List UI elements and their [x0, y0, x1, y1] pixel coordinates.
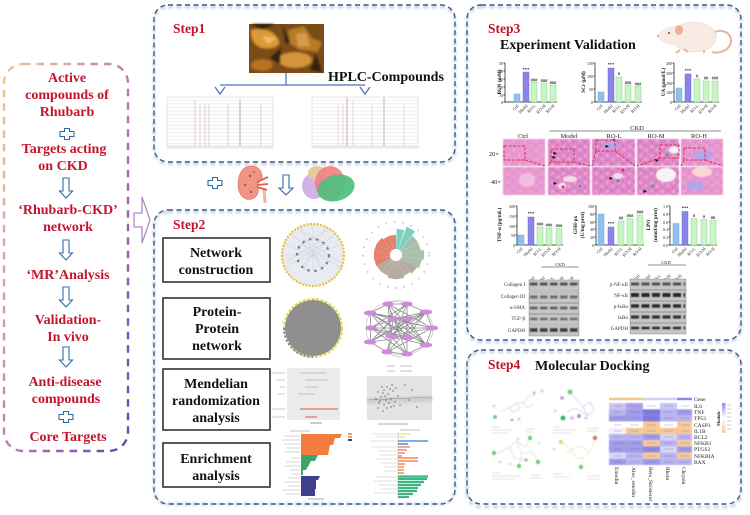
chart: docking heatmap: Emodin: [613, 467, 619, 485]
box: network construction: construction: [179, 263, 254, 278]
chart: BUN: ###: [531, 78, 538, 82]
panel: step 3: [467, 5, 741, 342]
text: rhubarb-CKD network: ‘Rhubarb-CKD’: [18, 203, 118, 218]
western blot: fibrosis markers: TGF-β: [511, 317, 525, 322]
chart: TNF-alpha: 0: [513, 243, 515, 248]
chart: LPO: Model: [676, 246, 688, 258]
chart: TNF-alpha: [496, 204, 563, 258]
western blot: fibrosis markers: Collagen III: [501, 295, 525, 300]
heading: step 3: Step3: [488, 21, 521, 36]
chart: docking heatmap: NFKB1: [694, 441, 712, 447]
chart: TNF-alpha: ***: [528, 211, 535, 216]
icon: kidney: [238, 166, 268, 203]
chart: docking heatmap: CASP3: [694, 423, 711, 429]
box: protein-protein network: Protein-: [193, 305, 242, 320]
chart: BUN: 10: [499, 93, 503, 98]
western blot: NF-kB pathway: NF-κB: [614, 294, 629, 299]
chart: SCr: Model: [602, 103, 614, 115]
histology group labels: Ctrl: [518, 133, 528, 140]
chart: TNF-alpha: RO-H: [551, 246, 562, 257]
chart: docking heatmap: IL6: [694, 404, 702, 410]
chart: docking heatmap: TP53: [694, 416, 706, 422]
chart: LPO: RO-L: [686, 246, 697, 257]
chart: SCr: [580, 61, 642, 115]
box: network construction: [163, 238, 270, 282]
text: MR analysis: ‘MR’Analysis: [26, 268, 110, 283]
chart: BUN: Ctrl: [511, 103, 520, 111]
panel: step 1: [154, 5, 455, 164]
panel: workflow summary: [4, 64, 128, 451]
chart: BUN: ***: [523, 67, 530, 72]
icon: lab mouse: [657, 22, 731, 53]
chart: BUN: 30: [499, 77, 503, 82]
chart: TNF-alpha: RO-M: [540, 246, 552, 258]
chart: TNF-alpha: RO-L: [532, 246, 543, 257]
arrow: down 2: [60, 240, 72, 260]
chart: UA: #: [696, 74, 699, 78]
text: HPLC-Compounds: HPLC-Compounds: [328, 70, 444, 85]
arrow: split tree: [215, 73, 370, 94]
arrow: down 3: [60, 287, 72, 307]
text: targets acting on CKD: on CKD: [38, 159, 88, 174]
chart: GSH-px: ###: [627, 213, 634, 218]
chart: BUN: RO-H: [545, 103, 556, 114]
chart: UA: ##: [704, 76, 709, 80]
chart: BUN: 50: [499, 61, 503, 66]
chart: SCr: SCr (μM): [580, 71, 587, 93]
chart: UA: 300: [666, 71, 672, 76]
chart: docking heatmap: NFKBIA: [694, 454, 715, 460]
chart: GSH-px: ###: [637, 210, 644, 214]
chart: GSH-px: ##: [619, 216, 624, 220]
chart: docking heatmap: Aloe_emodin: [630, 467, 636, 497]
chart: LPO: Ctrl: [670, 246, 679, 254]
chart: UA: RO-M: [697, 103, 709, 115]
chart: GSH-px: GSH-px: [573, 216, 579, 234]
chart: SCr: RO-H: [630, 103, 641, 114]
western blot: fibrosis markers: RO-L: [544, 275, 555, 286]
chart: GSH-px: 20: [590, 235, 594, 240]
arrow: big outline to steps: [134, 197, 150, 243]
box: protein-protein network: Protein: [195, 322, 239, 337]
chart: UA: ***: [685, 68, 692, 73]
chart: LPO: 1.0: [663, 204, 668, 209]
chart: SCr: Ctrl: [595, 103, 604, 111]
text: active compounds of rhubarb: compounds of: [25, 88, 109, 103]
western blot: NF-kB pathway: Ctrl: [632, 273, 641, 281]
chart: docking heatmap: IL1B: [694, 429, 706, 435]
chart: SCr: RO-M: [619, 103, 631, 115]
chart: UA: 200: [666, 81, 672, 86]
chart: LPO: [646, 204, 717, 258]
chart: GSH-px: 0: [592, 243, 594, 248]
chart: docking heatmap: Gene: [694, 397, 706, 403]
chart: UA: RO-L: [689, 103, 700, 114]
histology group labels: 20×: [489, 151, 499, 158]
chart: docking heatmap: Beta_Sitosterol: [647, 467, 653, 501]
western blot: NF-kB pathway: p-IκBα: [614, 305, 628, 310]
chart: LPO: RO-H: [705, 246, 716, 257]
chart: MR forest plot: [272, 368, 340, 423]
chart: SCr: 0: [591, 100, 593, 105]
western blot: NF-kB pathway: CKD: [661, 260, 671, 265]
chart: BUN: 0: [501, 100, 503, 105]
chart: GSH-px: 80: [590, 212, 594, 217]
text: validation in vivo: Validation-: [35, 313, 102, 328]
chart: GSH-px: Model: [602, 246, 614, 258]
icon: plus middle: [208, 178, 222, 188]
chart: UA: Ctrl: [673, 103, 682, 111]
chart: BUN: [496, 61, 557, 115]
chart: SCr: 100: [587, 74, 593, 79]
heading: step 2: Step2: [173, 217, 206, 232]
heading: step 1: Step1: [173, 21, 206, 36]
box: mendelian randomization: Mendelian: [184, 377, 248, 392]
chart: docking heatmap: Chrysin: [680, 467, 686, 485]
chart: GSH-px: RO-H: [632, 246, 643, 257]
chart: SCr: ###: [635, 82, 642, 86]
box: mendelian randomization: analysis: [192, 411, 240, 426]
text: anti-disease compounds: compounds: [32, 392, 101, 407]
box: mendelian randomization: [163, 369, 270, 430]
chart: BUN: RO-M: [535, 103, 547, 115]
chart: hub gene network: [364, 300, 438, 357]
chart: UA: 400: [666, 61, 672, 66]
western blot: fibrosis markers: Model: [534, 275, 546, 287]
legend: heatmap scale: Module: [716, 411, 721, 426]
text: targets acting on CKD: Targets acting: [22, 142, 106, 157]
chart: docking heatmap: TNF: [694, 410, 704, 416]
chart: GSH-px: ***: [608, 221, 615, 226]
box: protein-protein network: [163, 298, 270, 359]
text: active compounds of rhubarb: Rhubarb: [40, 105, 94, 120]
chart: BUN: 20: [499, 85, 503, 90]
chart: TNF-alpha: TNF-α (pg/mL): [496, 208, 503, 242]
chart: LPO: ***: [682, 206, 689, 210]
chart: BUN: ###: [550, 80, 557, 85]
text: validation in vivo: In vivo: [47, 330, 89, 345]
histology group labels: Model: [561, 133, 578, 140]
chart: SCr: ###: [625, 80, 632, 85]
chart: LPO: 0.0: [663, 243, 668, 248]
chart: LPO: 0.6: [663, 220, 668, 225]
image: rhubarb slices: [249, 24, 324, 73]
chart: LPO: (nmol/mg prot): [652, 208, 659, 242]
chart: docking heatmap: Rhein: [664, 467, 670, 480]
panel: step 4: [467, 350, 741, 507]
chart: MR scatter plot: [367, 366, 432, 424]
chart: compound-target circular network: [282, 224, 344, 286]
text: rhubarb-CKD network: network: [43, 220, 93, 235]
panel: step 2: [154, 210, 455, 504]
chart: docking heatmap: PTGS2: [694, 447, 710, 453]
chart: BUN: RO-L: [526, 103, 537, 114]
chart: TNF-alpha: 150: [509, 214, 515, 219]
chart: LPO: LPO: [646, 220, 652, 230]
chart: LPO: ##: [711, 215, 716, 220]
chart: UA: Model: [679, 103, 691, 115]
histology group labels: RO-H: [691, 133, 707, 140]
chart: UA: RO-H: [707, 103, 718, 114]
histology group labels: [489, 125, 721, 186]
icon: venn diagram: [302, 166, 358, 205]
chart: LPO: #: [703, 214, 706, 219]
chart: UA: [660, 61, 719, 115]
chart: enrichment bars left: [282, 431, 352, 499]
chart: GSH-px: 40: [590, 227, 594, 232]
box: enrichment analysis: [163, 443, 270, 487]
chart: LPO: 0.2: [663, 235, 668, 240]
text: core targets: Core Targets: [29, 430, 107, 445]
diagram: docking interaction 4: [552, 436, 600, 479]
western blot: fibrosis markers: Collagen I: [504, 283, 525, 288]
histology group labels: RO-M: [648, 133, 665, 140]
chart: GSH-px: (U/mg prot): [579, 212, 586, 238]
chart: GSH-px: 60: [590, 220, 594, 225]
chart: LPO: #: [693, 213, 696, 218]
chart: BUN: BUN (mM): [496, 69, 503, 94]
chart: LPO: 0.8: [663, 212, 668, 217]
icon: plus lower: [59, 412, 73, 422]
chart: GSH-px: RO-L: [613, 246, 624, 257]
chart: UA: UA (μmol/L): [660, 68, 667, 96]
chart: BUN: 40: [499, 69, 503, 74]
chart: BUN: Model: [517, 103, 529, 115]
western blot: NF-kB pathway: RO-H: [672, 273, 683, 284]
box: mendelian randomization: randomization: [172, 394, 260, 409]
chart: docking heatmap: BAX: [694, 460, 706, 466]
diagram: docking interaction 3: [492, 436, 542, 479]
chart: TNF-alpha: ###: [556, 223, 563, 228]
western blot: fibrosis markers: RO-H: [564, 275, 575, 286]
chart: docking heatmap: BCL2: [694, 435, 708, 441]
western blot: fibrosis markers: GAPDH: [508, 329, 525, 334]
western blot: fibrosis markers: [501, 262, 579, 336]
arrow: down centre: [279, 175, 293, 195]
western blot: NF-kB pathway: IκBα: [618, 316, 628, 321]
chart: HPLC chromatogram left: [167, 97, 273, 148]
text: anti-disease compounds: Anti-disease: [28, 375, 102, 390]
chart: TNF-alpha: ###: [537, 222, 544, 226]
chart: enrichment bars right: [370, 430, 428, 498]
chart: SCr: RO-L: [611, 103, 622, 114]
box: network construction: Network: [190, 246, 242, 261]
chart: GSH-px: [573, 204, 644, 258]
chart: LPO: RO-M: [695, 246, 707, 258]
icon: plus: [60, 128, 74, 140]
histology group labels: 40×: [491, 179, 501, 186]
chart: BUN: ###: [541, 78, 548, 83]
chart: UA: 100: [666, 90, 672, 95]
diagram: docking interaction 1: [492, 390, 544, 433]
heading: molecular docking: Molecular Docking: [535, 359, 649, 374]
chart: SCr: 150: [587, 61, 593, 66]
chart: GSH-px: RO-M: [621, 246, 633, 258]
chart: SCr: 50: [589, 87, 593, 92]
western blot: NF-kB pathway: GAPDH: [611, 327, 628, 332]
western blot: NF-kB pathway: Model: [640, 273, 652, 285]
chart: TNF-alpha: 200: [509, 204, 515, 209]
western blot: fibrosis markers: RO-M: [553, 275, 565, 287]
chart: TNF-alpha: Model: [522, 246, 534, 258]
box: protein-protein network: network: [192, 339, 242, 354]
image grid: histology: [503, 138, 723, 195]
western blot: NF-kB pathway: [610, 260, 686, 334]
chart: SCr: ***: [608, 62, 615, 67]
western blot: NF-kB pathway: RO-M: [660, 273, 672, 285]
heading: step 4: Step4: [488, 357, 521, 372]
western blot: fibrosis markers: Ctrl: [527, 275, 536, 283]
box: enrichment analysis: analysis: [192, 469, 240, 484]
diagram: docking interaction 2: [553, 390, 600, 433]
chart: TNF-alpha: Ctrl: [515, 246, 524, 254]
chart: UA: ###: [712, 76, 719, 80]
western blot: NF-kB pathway: RO-L: [651, 273, 662, 284]
western blot: fibrosis markers: α-SMA: [510, 306, 525, 311]
chart: radial bar: [363, 222, 429, 288]
chart: TNF-alpha: 100: [509, 224, 515, 229]
chart: SCr: #: [618, 71, 621, 76]
chart: LPO: 0.4: [663, 227, 668, 232]
western blot: fibrosis markers: CKD: [555, 262, 565, 267]
histology group labels: CKD: [630, 125, 644, 132]
heading: experiment validation: Experiment Validation: [500, 38, 636, 53]
arrow: down 1: [60, 178, 72, 198]
box: enrichment analysis: Enrichment: [180, 452, 252, 467]
chart: TNF-alpha: ###: [546, 222, 553, 228]
arrow: down 4: [60, 347, 72, 367]
legend: heatmap scale: [716, 403, 731, 433]
western blot: NF-kB pathway: p-NF-κB: [610, 283, 629, 288]
chart: HPLC chromatogram right: [312, 97, 418, 148]
chart: TNF-alpha: 50: [511, 233, 515, 238]
histology group labels: RO-L: [606, 133, 622, 140]
text: active compounds of rhubarb: Active: [48, 71, 86, 86]
chart: docking heatmap: [609, 397, 715, 501]
chart: GSH-px: Ctrl: [595, 246, 604, 254]
chart: UA: 0: [670, 100, 672, 105]
chart: dense PPI network: [284, 299, 342, 357]
chart: GSH-px: 100: [588, 204, 594, 209]
